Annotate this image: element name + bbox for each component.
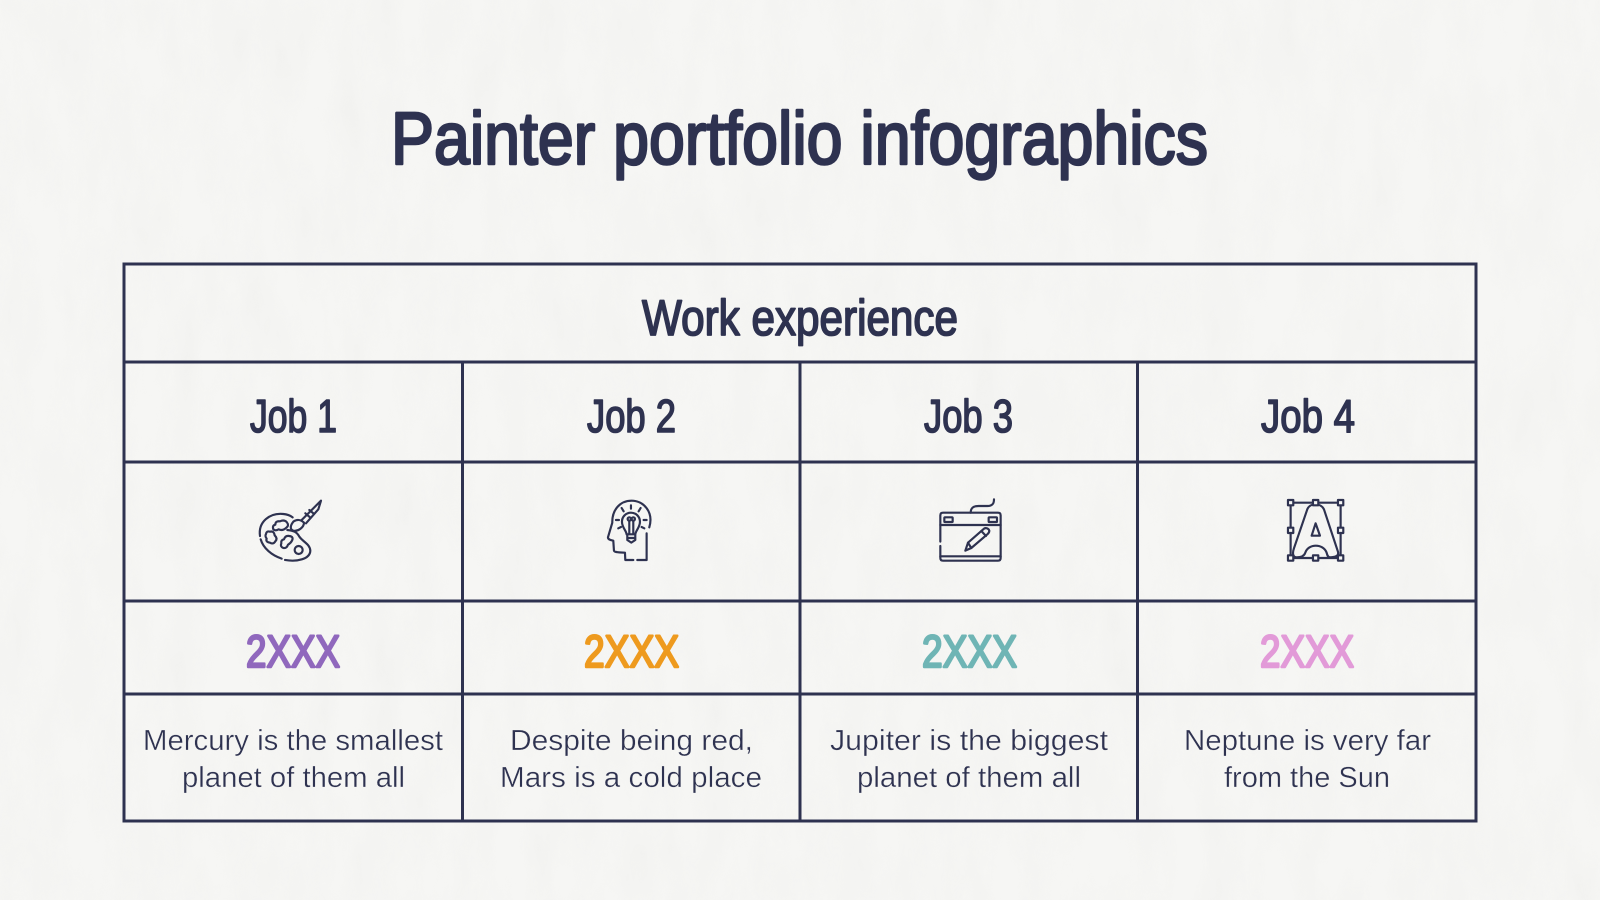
year 1: 2XXX: [246, 626, 340, 677]
job 4 description: Neptune is very far: [1184, 725, 1431, 757]
table grid: [124, 264, 1476, 821]
job 2 description: [500, 725, 762, 794]
job 3 heading: Job 3: [924, 390, 1013, 442]
job 3 description: planet of them all: [857, 762, 1081, 794]
title: Painter portfolio infographics: [391, 97, 1208, 180]
year 3: 2XXX: [922, 626, 1017, 677]
job 4 description: [1184, 725, 1431, 794]
column: job 4: [1184, 390, 1431, 794]
job 3 description: [830, 725, 1108, 794]
job 4 description: from the Sun: [1224, 762, 1390, 794]
job 1 description: [143, 725, 443, 794]
column: job 2: [500, 390, 762, 794]
job 2 description: Mars is a cold place: [500, 762, 762, 794]
job 2 heading: Job 2: [587, 390, 676, 442]
icon: head with light bulb: [608, 501, 650, 560]
year 2: 2XXX: [584, 626, 679, 677]
column: job 1: [143, 390, 443, 794]
column: job 3: [830, 390, 1108, 794]
job 4 heading: Job 4: [1261, 390, 1355, 442]
table heading: Work experience: [642, 290, 958, 346]
icon: graphics tablet: [940, 499, 1001, 561]
job 1 description: Mercury is the smallest: [143, 725, 443, 757]
icon: paint palette: [260, 501, 321, 561]
job 1 heading: Job 1: [250, 390, 337, 442]
year 4: 2XXX: [1260, 626, 1354, 677]
job 3 description: Jupiter is the biggest: [830, 725, 1108, 757]
job 2 description: Despite being red,: [510, 725, 753, 757]
job 1 description: planet of them all: [182, 762, 405, 794]
panel: work experience table: [124, 264, 1476, 821]
icon: letter A with vector handles: [1288, 500, 1343, 561]
